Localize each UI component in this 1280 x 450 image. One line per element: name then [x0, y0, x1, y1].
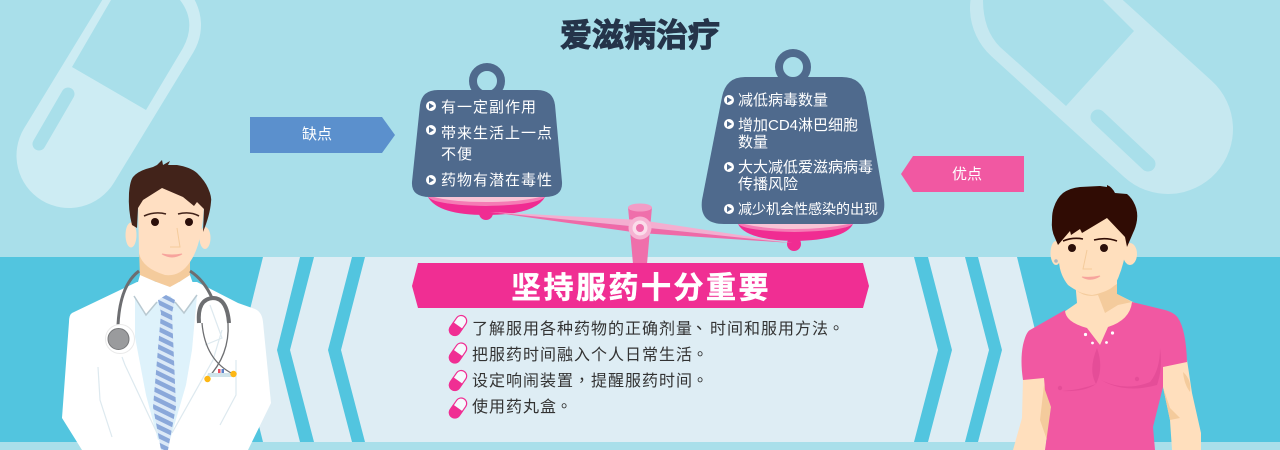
- tip 2: 把服药时间融入个人日常生活: [472, 347, 693, 364]
- doctor illustration: [62, 160, 271, 450]
- bullet list: advantages: 减低病毒数量: [738, 92, 828, 109]
- scale post: [628, 204, 652, 264]
- weight ring: [779, 53, 807, 81]
- tip 1: 、: [696, 316, 713, 333]
- background: central chevron panel: [240, 257, 1040, 442]
- patient ears: [1050, 241, 1137, 265]
- patient features: [1063, 238, 1117, 279]
- doctor pocket and pens: [204, 369, 237, 382]
- weight body: [702, 77, 884, 224]
- stethoscope: [106, 271, 233, 379]
- patient hair: [1052, 185, 1137, 247]
- tag: advantages: [901, 156, 1024, 192]
- decorative capsule: top right: [983, 0, 1168, 164]
- bullet list: disadvantages: [426, 99, 553, 189]
- tip 4: [446, 394, 578, 421]
- patient shirt shading: [1058, 348, 1161, 391]
- patient arms: [1013, 360, 1201, 450]
- bullet list: disadvantages: 有一定副作用: [441, 99, 537, 116]
- bullet list: advantages: 大大减低爱滋病病毒: [738, 159, 873, 176]
- tip 1: 。: [833, 316, 850, 333]
- doctor hair: [129, 160, 211, 232]
- tag: advantages: 优点: [952, 166, 982, 183]
- bullet list: advantages: [724, 92, 878, 217]
- doctor coat: [62, 282, 271, 450]
- tip 4: 。: [561, 394, 578, 411]
- tag: disadvantages: [250, 117, 395, 153]
- tips list: [446, 313, 850, 421]
- doctor ears: [126, 222, 210, 249]
- tip 3: 设定响闹装置: [472, 373, 574, 390]
- tip 3: ，: [578, 368, 595, 385]
- doctor collar: [134, 275, 197, 315]
- tip 2: [446, 341, 714, 366]
- tag: disadvantages: 缺点: [302, 126, 332, 143]
- left weight: disadvantages: [412, 67, 562, 197]
- banner: adherence heading: 坚持服药十分重要: [511, 272, 771, 305]
- patient shirt: [1022, 302, 1187, 450]
- bullet list: advantages: 减少机会性感染的出现: [738, 201, 878, 217]
- weight ring: [473, 67, 501, 95]
- patient illustration: [1013, 185, 1201, 450]
- weight body: [412, 90, 562, 197]
- patient neck shadow: [1076, 284, 1132, 313]
- bullet list: disadvantages: 带来生活上一点: [441, 125, 553, 142]
- balance scale: [428, 197, 853, 264]
- scale pivot: [628, 216, 652, 240]
- bullet list: advantages: 传播风险: [738, 176, 798, 193]
- title: 爱滋病治疗: [560, 17, 720, 53]
- doctor face: [138, 180, 204, 275]
- banner: adherence heading: [412, 263, 869, 308]
- tip 2: 。: [697, 342, 714, 359]
- tip 3: [446, 368, 714, 393]
- doctor shirt: [135, 295, 197, 440]
- decorative capsule: top left: [39, 0, 189, 156]
- tip 3: 。: [697, 368, 714, 385]
- patient earring: [1054, 259, 1058, 263]
- tip 4: 使用药丸盒: [472, 399, 557, 416]
- bullet list: disadvantages: 不便: [441, 146, 473, 163]
- right weight: advantages: [702, 53, 884, 224]
- bullet list: disadvantages: 药物有潜在毒性: [441, 172, 553, 189]
- tip 3: 提醒服药时间: [591, 372, 693, 390]
- patient neck: [1064, 280, 1135, 345]
- doctor tie: [153, 295, 176, 450]
- tip 1: 了解服用各种药物的正确剂量: [472, 321, 693, 338]
- background: blue band: [0, 257, 1280, 442]
- tip 1: [446, 313, 850, 338]
- doctor features: [144, 213, 199, 257]
- tip 1: 时间和服用方法: [710, 320, 829, 338]
- scale beam: [490, 212, 792, 243]
- doctor coat folds: [98, 305, 236, 437]
- bullet list: advantages: 数量: [738, 134, 768, 151]
- right pan: [738, 224, 853, 251]
- doctor neck: [139, 250, 190, 287]
- bullet list: advantages: 增加CD4淋巴细胞: [738, 117, 858, 134]
- left pan: [428, 197, 545, 220]
- patient shirt buttons: [1084, 331, 1114, 344]
- patient face: [1057, 210, 1127, 295]
